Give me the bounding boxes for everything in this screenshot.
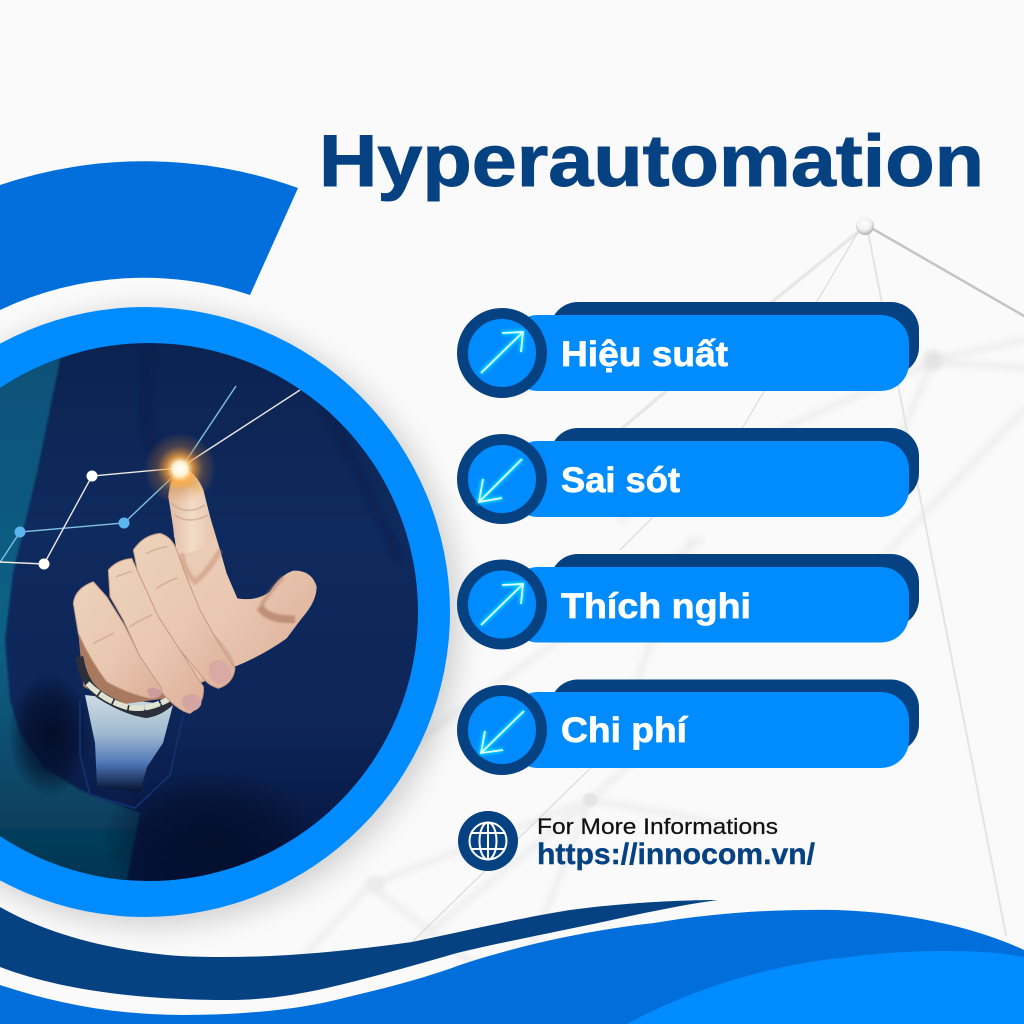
row: Hiệu suất: Hiệu suất — [561, 335, 728, 374]
jacket sleeve edge — [80, 700, 183, 808]
row: Thích nghi — [462, 554, 919, 644]
photo: hand pointing at chart — [0, 340, 430, 910]
fingertip warm light — [169, 476, 202, 494]
icon: arrow up — [481, 584, 523, 625]
jacket lower shading — [114, 782, 305, 881]
hand creases — [172, 503, 295, 619]
row: Chi phí: Chi phí — [561, 711, 688, 750]
bracelet links — [87, 683, 168, 708]
bracelet — [79, 657, 171, 714]
icon: arrow down — [479, 459, 522, 502]
finger 4 — [73, 582, 162, 698]
jacket lapel shade — [146, 350, 170, 480]
icon: globe — [458, 811, 518, 871]
shirt cuff — [85, 695, 173, 792]
contact text — [537, 814, 816, 871]
icon: arrow down — [481, 711, 524, 753]
palm, thumb and index finger — [160, 468, 317, 683]
row: Chi phí — [462, 680, 919, 770]
chart points — [14, 470, 130, 570]
palm shade — [200, 633, 235, 683]
teal backdrop — [0, 340, 140, 890]
wave: medium blue — [0, 910, 1024, 1024]
wrist — [78, 633, 167, 705]
knuckle creases — [93, 547, 177, 643]
wave: dark blue swoosh — [0, 900, 718, 1000]
hand — [73, 468, 317, 714]
contact text: https://innocom.vn/ — [537, 838, 816, 871]
row: Thích nghi: Thích nghi — [561, 587, 751, 626]
jacket fold — [325, 405, 400, 560]
jacket shading — [11, 680, 88, 792]
contact text: For More Informations — [537, 814, 778, 839]
index finger highlight — [168, 473, 212, 553]
wave: light blue — [627, 951, 1024, 1024]
chart lines — [0, 386, 300, 570]
circle shadow — [0, 310, 460, 926]
blue arc top-left — [0, 161, 298, 310]
finger 2 — [133, 533, 235, 688]
icon: arrow up — [481, 332, 523, 373]
row: Sai sót — [462, 428, 919, 518]
title: Hyperautomation — [319, 121, 984, 202]
finger 3 — [108, 558, 203, 713]
fingernails — [147, 660, 232, 711]
fingertip glow — [144, 433, 216, 505]
network node — [856, 217, 874, 235]
row: Sai sót: Sai sót — [561, 461, 680, 500]
blue ring — [0, 307, 450, 917]
background network pattern — [300, 229, 1024, 1000]
row: Hiệu suất — [462, 302, 919, 392]
